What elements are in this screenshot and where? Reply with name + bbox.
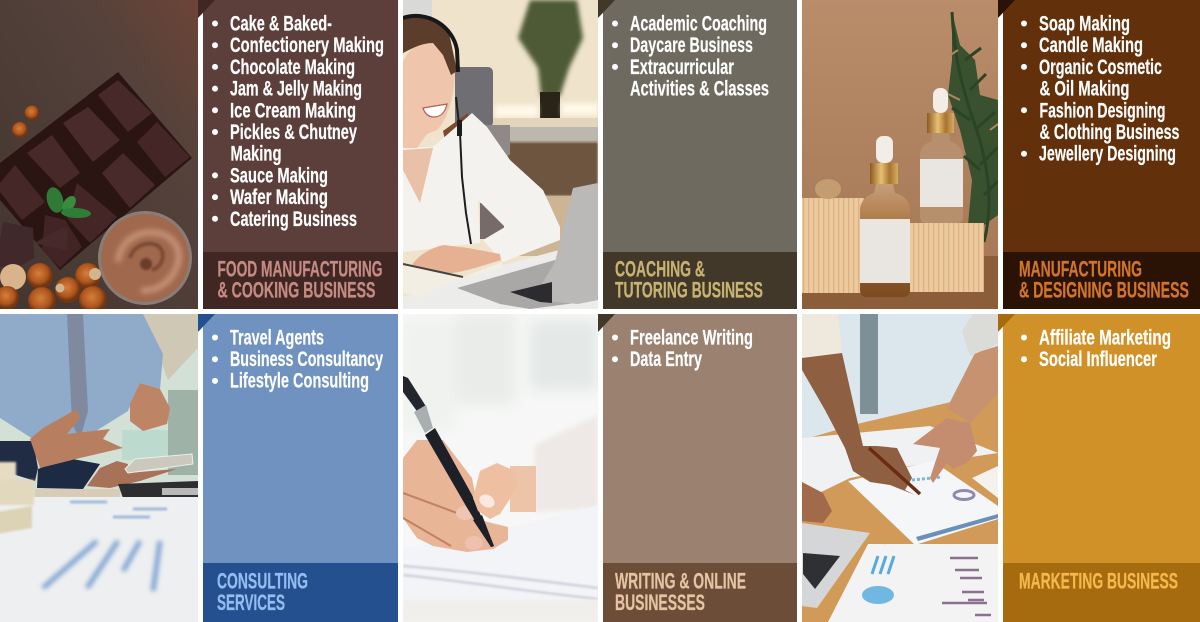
list: food business ideas: Pickles & Chutney xyxy=(230,120,357,144)
hazelnuts xyxy=(0,106,107,315)
heading: food manufacturing and cooking business: FOOD MANUFACTURING xyxy=(218,257,382,282)
heading: consulting services: SERVICES xyxy=(217,590,285,615)
heading: writing and online businesses: WRITING & ONLINE xyxy=(615,569,746,594)
thumb xyxy=(473,463,510,547)
panel: writing and online businesses xyxy=(598,314,797,622)
list: food business ideas: Ice Cream Making xyxy=(230,98,356,122)
closed laptop xyxy=(118,481,198,498)
photo: hand writing with a pen xyxy=(403,314,598,622)
list: coaching ideas: Daycare Business xyxy=(630,33,753,57)
heading: marketing business xyxy=(1003,563,1200,622)
list: coaching ideas: Activities & Classes xyxy=(630,77,769,101)
heading: consulting services xyxy=(203,563,398,622)
heading: consulting services: CONSULTING xyxy=(217,569,308,594)
office background xyxy=(122,314,198,475)
panel: manufacturing and designing xyxy=(998,0,1200,309)
list: food business ideas xyxy=(212,12,384,231)
wrist xyxy=(510,466,536,512)
list: food business ideas: Wafer Making xyxy=(230,185,328,209)
list: food business ideas: Catering Business xyxy=(230,207,357,231)
corner notch xyxy=(998,314,1015,332)
wooden blocks xyxy=(802,198,984,293)
laptop xyxy=(457,183,598,309)
background plant and shelf xyxy=(455,0,598,256)
heading: coaching and tutoring business xyxy=(603,252,797,309)
blurred background xyxy=(452,316,598,402)
pebble xyxy=(815,179,841,199)
chocolate spread bowl xyxy=(98,211,192,305)
photo: cosmetic dropper bottles on wood blocks xyxy=(802,0,998,309)
corner notch xyxy=(998,0,1015,18)
list: writing ideas xyxy=(612,325,753,371)
corner notch xyxy=(598,314,615,332)
laptop xyxy=(802,523,870,608)
list: manufacturing ideas: & Oil Making xyxy=(1040,77,1130,101)
list: food business ideas: Sauce Making xyxy=(230,163,328,187)
heading: writing and online businesses: BUSINESSES xyxy=(615,590,705,615)
tablet xyxy=(125,454,193,473)
panel: food manufacturing and cooking xyxy=(198,0,398,309)
panel: consulting services xyxy=(198,314,398,622)
list: food business ideas: Making xyxy=(230,142,282,166)
fountain pen xyxy=(869,448,920,494)
list: coaching ideas: Academic Coaching xyxy=(630,12,767,36)
woman xyxy=(403,16,560,278)
white papers xyxy=(802,426,998,622)
heading: manufacturing and designing business xyxy=(1003,252,1200,309)
list: manufacturing ideas: Soap Making xyxy=(1039,12,1130,36)
pen xyxy=(403,376,494,547)
heading: food manufacturing and cooking business: & COOKING BUSINESS xyxy=(218,278,376,303)
photo: business consultants with tablet and papers xyxy=(0,314,198,622)
list: writing ideas: Freelance Writing xyxy=(630,325,753,349)
evergreen sprig xyxy=(948,12,998,242)
broken chocolate pieces xyxy=(0,222,43,267)
heading: writing and online businesses xyxy=(603,563,797,622)
arms and hands xyxy=(802,314,998,523)
white sleeve xyxy=(535,415,598,512)
mint leaf xyxy=(46,187,91,218)
chocolate bar xyxy=(0,72,192,270)
corner notch xyxy=(198,314,215,332)
chart bars and pie xyxy=(862,477,991,615)
wooden table xyxy=(802,391,998,622)
list: consulting ideas: Travel Agents xyxy=(230,325,324,349)
list: manufacturing ideas xyxy=(1021,12,1180,166)
paper xyxy=(403,505,598,622)
corner notch xyxy=(598,0,615,18)
list: food business ideas: Jam & Jelly Making xyxy=(230,77,362,101)
blurred paper with blue chart xyxy=(0,489,198,622)
heading: coaching and tutoring business: COACHING & xyxy=(615,257,705,282)
man in shirt and tie xyxy=(0,314,177,489)
panel: marketing business xyxy=(998,314,1200,622)
list: writing ideas: Data Entry xyxy=(630,347,702,371)
desk and notebook xyxy=(403,250,598,309)
small dropper bottle xyxy=(860,136,910,297)
hand xyxy=(403,440,508,552)
list: food business ideas: Confectionery Making xyxy=(230,33,384,57)
photo: hands reviewing charts on wooden table xyxy=(802,314,998,622)
list: manufacturing ideas: Candle Making xyxy=(1039,33,1143,57)
corner notch xyxy=(198,0,215,18)
panel: coaching and tutoring xyxy=(598,0,797,309)
list: coaching ideas xyxy=(612,12,769,101)
heading: food manufacturing and cooking business xyxy=(203,252,398,309)
list: coaching ideas: Extracurricular xyxy=(630,55,734,79)
tall dropper bottle xyxy=(920,88,963,223)
stack of books xyxy=(0,462,34,534)
list: marketing ideas xyxy=(1021,325,1171,371)
list: food business ideas: Cake & Baked- xyxy=(230,12,332,36)
list: food business ideas: Chocolate Making xyxy=(230,55,355,79)
photo: smiling woman with headset at laptop xyxy=(403,0,598,309)
heading: coaching and tutoring business: TUTORING BUSINESS xyxy=(615,278,763,303)
list: consulting ideas: Lifestyle Consulting xyxy=(230,369,369,393)
list: consulting ideas xyxy=(212,325,383,393)
photo: chocolate bar, spread and hazelnuts xyxy=(0,0,198,315)
list: consulting ideas: Business Consultancy xyxy=(230,347,383,371)
